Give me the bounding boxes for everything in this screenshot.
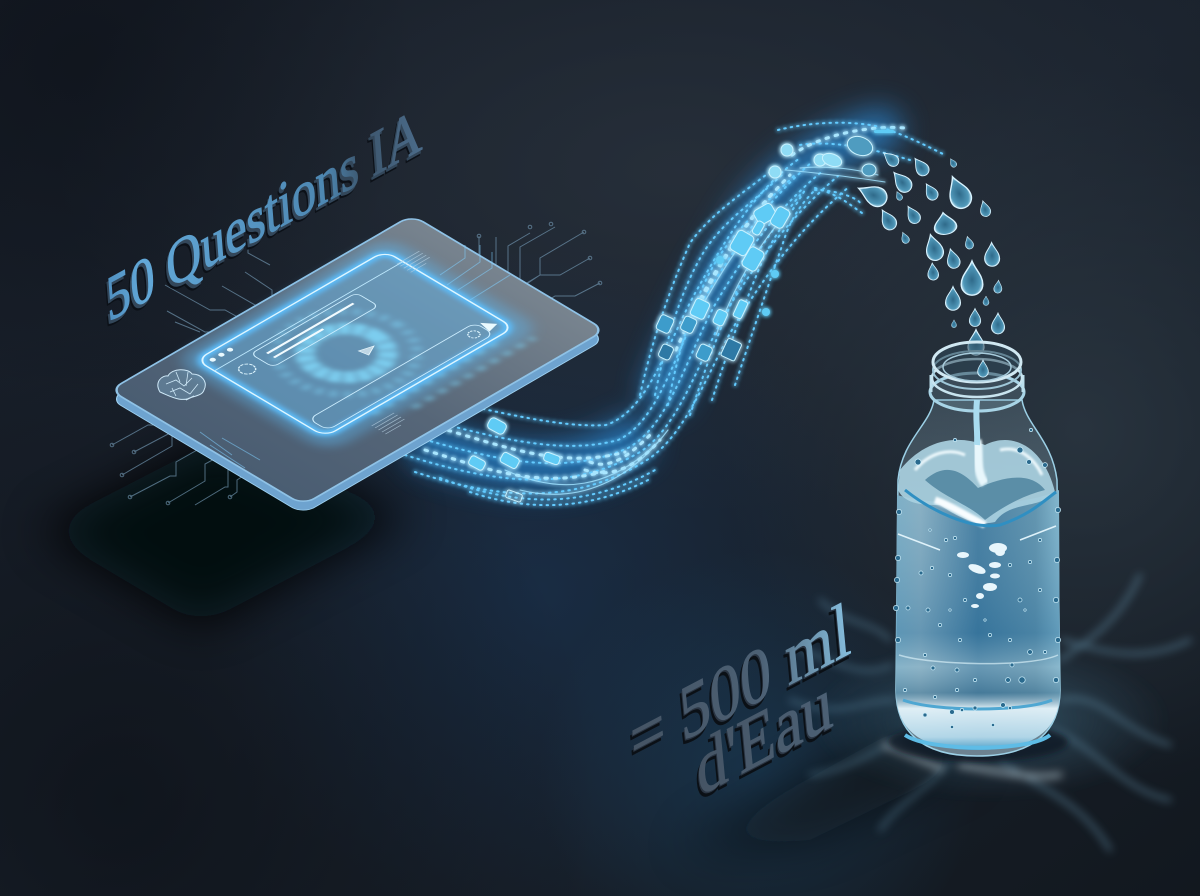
water drops falling into the bottle [854, 149, 1005, 355]
data stream glow [430, 130, 880, 467]
data stream: dotted strands flowing into drops [405, 123, 945, 505]
blurred glowing ring and data [246, 261, 534, 429]
shadow of the tablet on the floor [40, 440, 410, 625]
bottle neck and threads [930, 342, 1024, 445]
circuit traces around the tablet [110, 222, 602, 505]
amount label: = 500 ml d'Eau [624, 585, 854, 818]
inner chat window [196, 251, 514, 437]
water caustic light rays around the bottle base [790, 575, 1190, 850]
cursor arrow [358, 344, 379, 356]
send arrow [477, 318, 500, 331]
amount line 2: d'Eau [693, 658, 836, 813]
tablet glass surface [110, 215, 605, 505]
amount line 1: = 500 ml [626, 588, 852, 786]
water volume [896, 490, 1060, 750]
data stream: file and chat icons [468, 130, 894, 502]
tablet halo behind inner panel [172, 236, 543, 453]
shadow of the bottle on the floor [680, 725, 975, 850]
heading: 50 Questions IA: 50 Questions IA [102, 96, 422, 340]
small hatch lines [397, 251, 433, 272]
heading: 50 Questions IA: 50 Questions IA [104, 92, 424, 336]
amount line 2: d'Eau [690, 663, 834, 818]
rising bubbles column [957, 543, 1007, 608]
heading: 50 Questions IA: 50 Questions IA [101, 98, 421, 342]
bottle base shadow ring [888, 722, 1068, 762]
splash at the water surface [898, 440, 1056, 526]
avatar icon [235, 362, 259, 376]
chat bubble [251, 293, 379, 367]
amount line 2: d'Eau [692, 660, 835, 815]
bottle of water [888, 342, 1068, 762]
tablet: isometric glass slab [110, 215, 605, 514]
side highlights [898, 526, 1056, 550]
droplets on the glass [893, 428, 1061, 729]
input field [309, 323, 494, 430]
amount line 1: = 500 ml [624, 590, 851, 789]
drop inside the neck [978, 360, 988, 377]
brain icon [158, 370, 205, 400]
amount line 1: = 500 ml [627, 585, 853, 784]
traces visible through the glass [200, 245, 510, 468]
tablet edge thickness [110, 224, 605, 514]
bottle body glass [896, 400, 1060, 756]
